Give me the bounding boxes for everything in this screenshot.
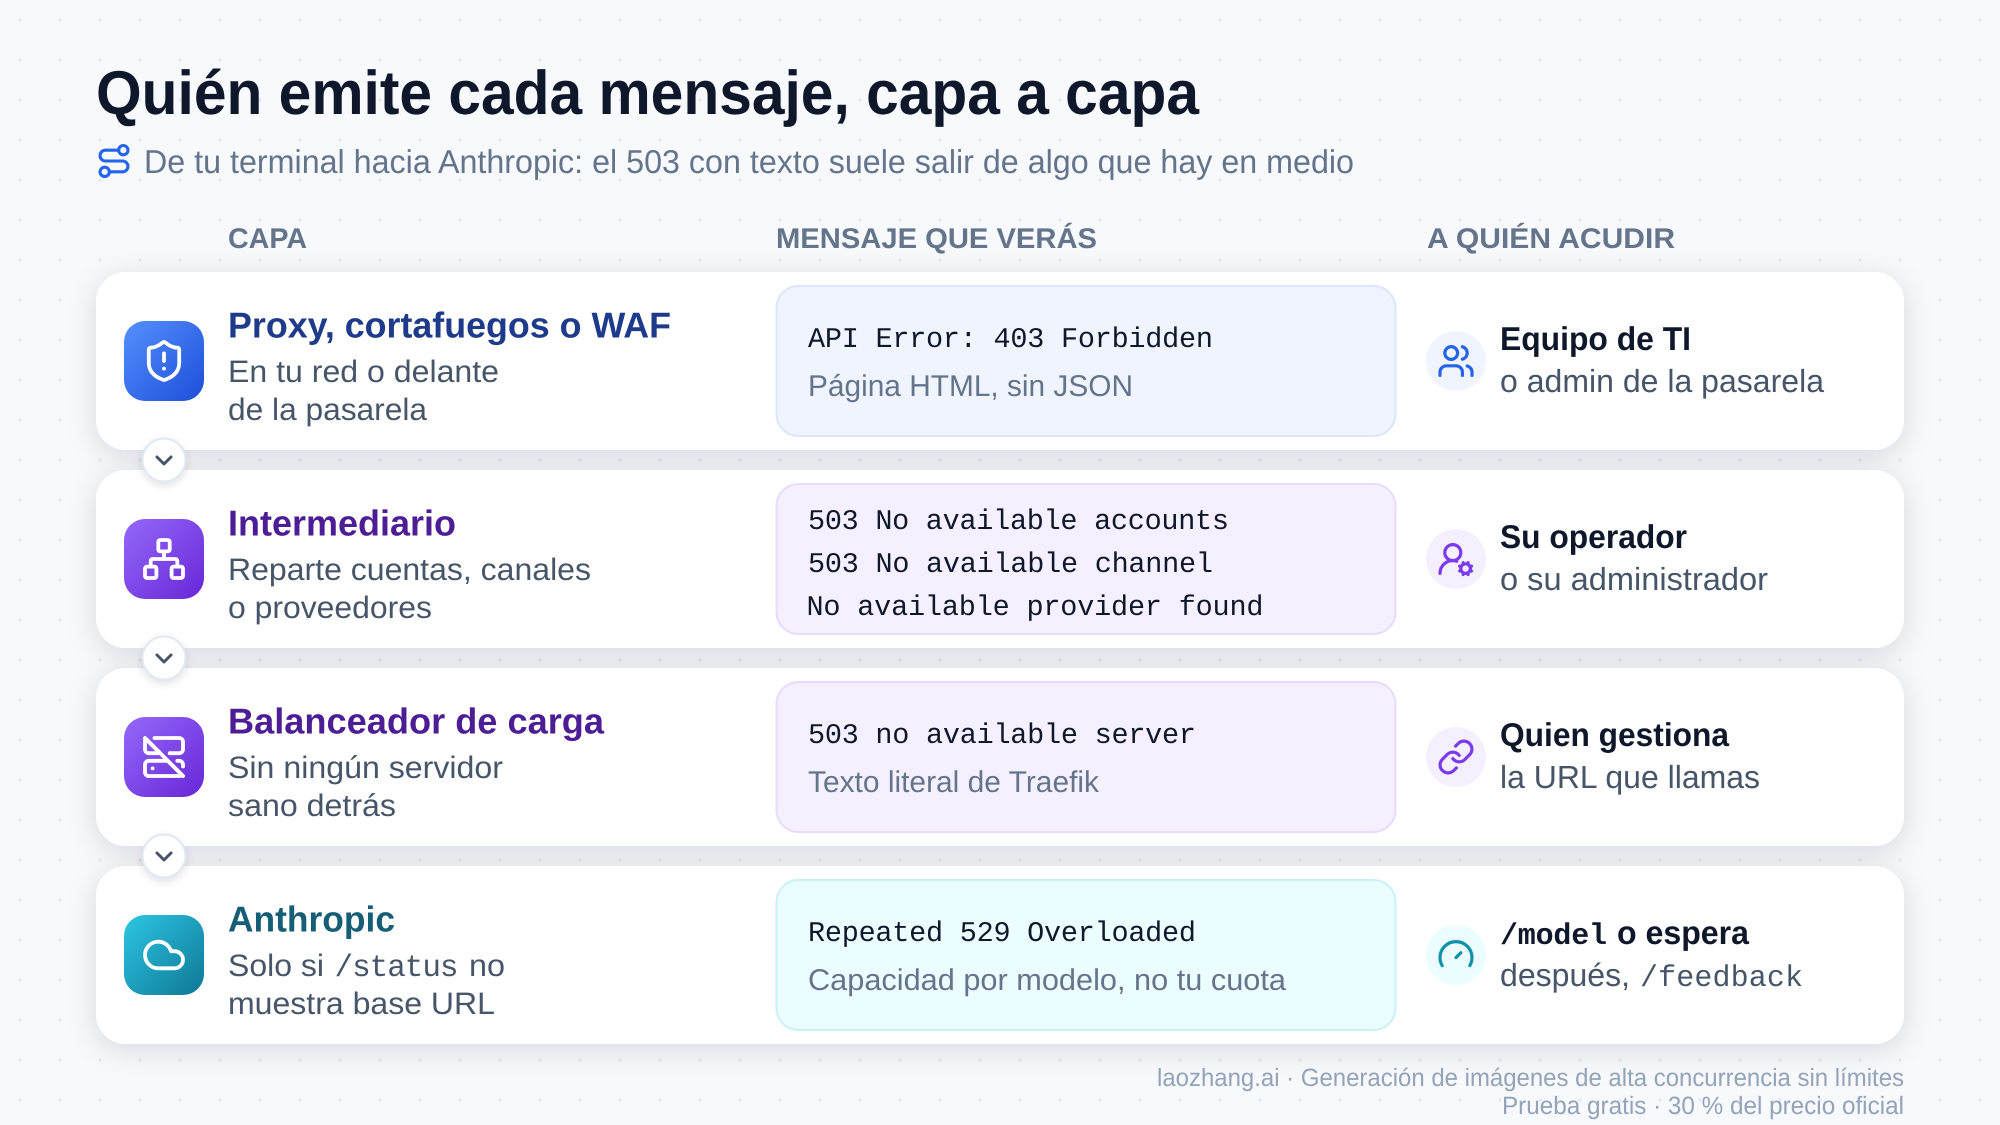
panel: row proxy [96,272,1904,450]
footer note: laozhang.ai · Generación de imágenes de alta concurrencia sin límites [1157,1064,1904,1092]
contact text: model: /feedback [1640,962,1803,996]
footer note [1157,1064,1904,1120]
contact text: su operador: Su operador [1500,518,1687,555]
panel: row intermediario [96,470,1904,648]
layer text: intermediario: Intermediario [228,502,456,544]
contact text: model: /model [1500,920,1607,954]
contact text: model: o espera [1617,914,1750,951]
header: a quién acudir: A QUIÉN ACUDIR [1427,222,1675,255]
header: capa: CAPA [228,223,307,255]
icon: gauge [1426,925,1486,985]
layer text: anthropic [228,898,505,1021]
message box: 529: Capacidad por modelo, no tu cuota [808,964,1286,997]
subtitle text: De tu terminal hacia Anthropic: el 503 con texto suele salir de algo que hay en medio [144,143,1354,180]
message box: 403 [776,286,1396,436]
arrow: intermediario to balanceador [142,636,186,680]
footer note: Prueba gratis · 30 % del precio oficial [1502,1092,1904,1120]
layer text: proxy [228,304,671,427]
layer text: anthropic: Anthropic [228,898,395,940]
layer text: balanceador: sano detrás [228,788,396,823]
header: mensaje: MENSAJE QUE VERÁS [776,222,1097,255]
contact text: su operador [1500,518,1768,597]
layer text: anthropic: Solo si [228,948,324,983]
contact text: su operador: o su administrador [1500,561,1768,597]
contact text: model [1500,914,1803,996]
panel: row anthropic [96,866,1904,1044]
icon: user cog [1426,529,1486,589]
icon: cloud [124,915,204,995]
message box: 503 accounts: 503 No available channel [808,548,1213,581]
title: Quién emite cada mensaje, capa a capa [96,59,1199,128]
layer text: balanceador: Sin ningún servidor [228,750,503,785]
layer text: anthropic: muestra base URL [228,986,495,1021]
layer text: proxy: En tu red o delante [228,354,499,389]
contact text: quien gestiona [1500,716,1760,795]
message box: 503 server: 503 no available server [808,719,1196,752]
contact text: equipo de TI: o admin de la pasarela [1500,363,1824,399]
message box: 503 accounts: No available provider found [806,591,1264,624]
contact text: quien gestiona: Quien gestiona [1500,716,1730,753]
icon: server off [124,717,204,797]
message box: 529: Repeated 529 Overloaded [808,917,1196,950]
layer text: balanceador [228,700,605,823]
contact text: equipo de TI: Equipo de TI [1500,320,1691,357]
icon: users [1426,331,1486,391]
panel: row balanceador [96,668,1904,846]
icon: link [1426,727,1486,787]
icon: route [100,146,128,176]
message box: 503 server [776,682,1396,832]
message box: 503 accounts: 503 No available accounts [808,505,1229,538]
message box: 529 [776,880,1396,1030]
layer text: anthropic: no [469,948,505,983]
message box: 403: Página HTML, sin JSON [808,370,1133,403]
subtitle with route icon [100,143,1354,180]
layer text: proxy: Proxy, cortafuegos o WAF [228,304,671,346]
message box: 503 accounts [776,484,1396,634]
contact text: model: después, [1500,957,1630,993]
contact text: quien gestiona: la URL que llamas [1500,759,1760,795]
icon: shield [124,321,204,401]
layer text: intermediario [228,502,591,625]
layer text: intermediario: o proveedores [228,590,432,625]
message box: 403: API Error: 403 Forbidden [808,323,1213,356]
layer text: intermediario: Reparte cuentas, canales [228,552,591,587]
layer text: anthropic: /status [334,951,458,986]
icon: network [124,519,204,599]
contact text: equipo de TI [1500,320,1824,399]
layer text: proxy: de la pasarela [228,392,428,427]
column headers [228,222,1675,255]
arrow: balanceador to anthropic [142,834,186,878]
layer text: balanceador: Balanceador de carga [228,700,605,742]
message box: 503 server: Texto literal de Traefik [808,766,1100,799]
arrow: proxy to intermediario [142,438,186,482]
